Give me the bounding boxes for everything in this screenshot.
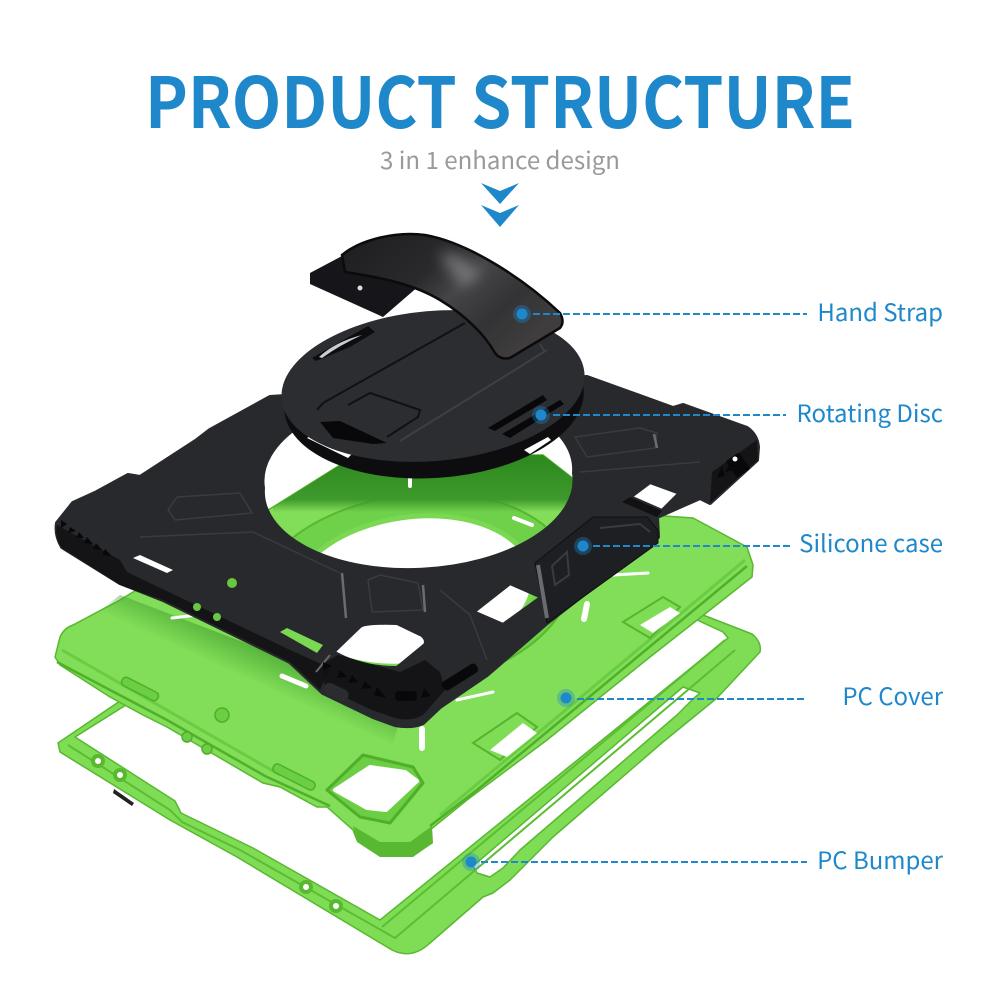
rotating disc (275, 298, 591, 488)
strap highlight (438, 252, 482, 288)
silicone case (56, 377, 758, 726)
callout: Silicone case (574, 524, 943, 559)
disc right slots (488, 395, 564, 438)
disc stand outline (317, 323, 465, 437)
callout: Silicone case: Silicone case (799, 524, 943, 559)
callout: PC Bumper: PC Bumper (817, 841, 944, 876)
case raised corner grip (535, 517, 658, 623)
cover speaker grilles (120, 676, 317, 791)
disc upper slot (312, 326, 375, 361)
cover edge rim lines (57, 566, 747, 826)
subtitle: 3 in 1 enhance design (380, 141, 620, 176)
callout: PC Bumper (462, 841, 944, 876)
case vents (61, 452, 750, 703)
cover centre hole (281, 501, 543, 681)
cover raised ring (240, 474, 584, 708)
cover small white slots (172, 479, 648, 748)
strap leather band (342, 234, 562, 358)
icon: double chevron arrow (481, 183, 519, 227)
case bottom corner (322, 655, 445, 719)
callout: Hand Strap: Hand Strap (817, 293, 943, 328)
case side walls (56, 440, 758, 690)
cover camera cutout (327, 755, 423, 823)
disc top (275, 298, 591, 474)
bumper holes (93, 756, 341, 911)
hand strap (310, 234, 562, 358)
case ridges (140, 428, 700, 660)
disc white slits (307, 436, 551, 458)
callout: Rotating Disc: Rotating Disc (797, 394, 943, 429)
cover side slots (473, 597, 680, 760)
title: PRODUCT STRUCTURE (145, 48, 855, 149)
case small openings (133, 555, 173, 573)
callout: PC Cover (557, 677, 944, 712)
callout: Hand Strap (513, 293, 943, 328)
disc thumb cutout (320, 421, 387, 444)
cover lower lump (353, 826, 433, 857)
shadow cast by case on cover, lower left (90, 595, 400, 770)
shadow cast by disc on cover, inside hole (273, 455, 578, 516)
strap fabric end (310, 256, 420, 317)
case grey highlights (342, 434, 657, 618)
disc underside (279, 312, 589, 488)
bumper ridge lines (68, 640, 735, 938)
bumper black clip (113, 789, 134, 806)
callout: Rotating Disc (532, 394, 943, 429)
callout: PC Cover: PC Cover (842, 677, 944, 712)
PC cover (55, 455, 753, 857)
PC bumper frame (58, 615, 760, 954)
